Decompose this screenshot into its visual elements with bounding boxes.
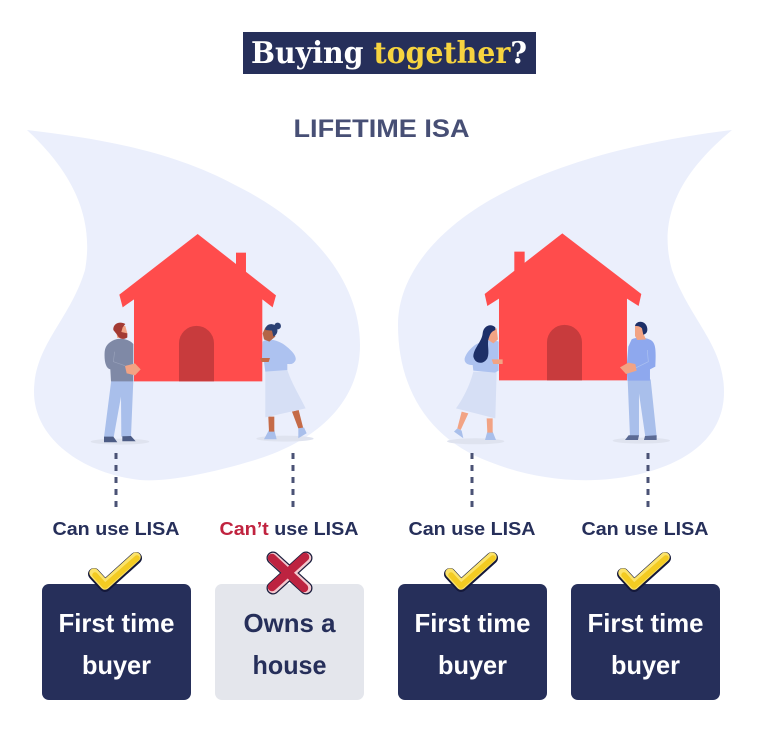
icon: tick 3 [450,557,493,586]
label: can't use 2: Can’t use LISA [220,518,358,539]
icon: cross [272,557,306,588]
figure: woman left [256,323,314,442]
card: first time buyer 4: First time [588,608,704,638]
dashed connector 2 [292,453,294,508]
label: can use 1: Can use LISA [52,518,180,539]
dashed connector 4 [646,453,650,508]
card: first time buyer 3: First time [414,608,530,638]
card: first time buyer 4 [571,584,720,700]
card: first time buyer 4: buyer [611,650,680,680]
icon: tick 1 [94,557,137,586]
panel: right couple illustration [398,130,732,480]
card: first time buyer 1 [42,584,191,700]
dashed connector 1 [114,453,118,508]
card: first time buyer 1: buyer [82,650,151,680]
icon: house right [485,233,641,380]
icon: tick 4 [623,557,666,586]
figure: man right [613,322,670,444]
background blob right [398,130,732,480]
title: Buying together? [251,36,527,71]
background blob left [27,130,360,480]
label: can use 4: Can use LISA [582,518,708,539]
card: first time buyer 1: First time [58,608,174,638]
card: first time buyer 3 [398,584,547,700]
icon: house left [119,234,276,381]
dashed connector 3 [470,453,474,508]
card: owns a house: house [252,650,326,680]
panel: left couple illustration [27,130,360,480]
card: owns a house [215,584,364,700]
label: can use 3: Can use LISA [408,518,536,539]
card: owns a house: Owns a [244,608,336,638]
figure: man left [91,323,149,445]
heading: Lifetime ISA: LIFETIME ISA [294,115,470,143]
figure: woman right [447,325,504,444]
card: first time buyer 3: buyer [438,650,507,680]
